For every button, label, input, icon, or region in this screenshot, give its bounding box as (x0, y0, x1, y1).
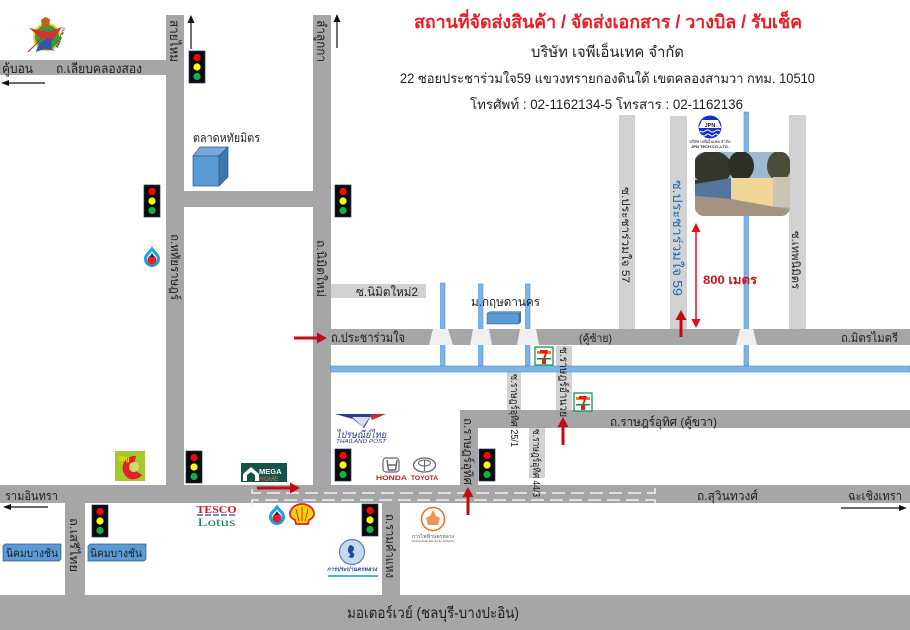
logo: Tesco Lotus: Lotus (198, 515, 236, 529)
icon: PTT station north (144, 246, 160, 267)
logo: Toyota (411, 458, 439, 482)
logo: Thailand Post: ไปรษณีย์ไทย (336, 429, 387, 441)
label: Soi 59: ซ.ประชาร่วมใจ 59 (670, 180, 685, 296)
label: Soi Rat Amnuai: ซ.ราษฎร์อำนวย (557, 347, 570, 417)
sign: Nikhom Bang Chan east: นิคมบางชัน (90, 547, 142, 560)
label: Khu Bon: คู้บอน (2, 61, 33, 77)
logo: Mega Home (241, 463, 287, 483)
icon: PTT station south (269, 504, 285, 525)
photo: company site (692, 151, 791, 216)
icon: Khlong Sam Wa emblem (28, 17, 66, 52)
phone and fax: โทรศัพท์ : 02-1162134-5 โทรสาร : 02-1162136 (470, 96, 743, 112)
logo: Mega Home: MEGA (259, 467, 282, 476)
label: Ramkhamhaeng: ถ.รามคำแหง (383, 514, 397, 578)
address: 22 ซอยประชาร่วมใจ59 แขวงทรายกองดินใต้ เขตคลองสามวา กทม. 10510 (400, 70, 815, 86)
label: Lam Luk Ka: ลำลูกกา (313, 20, 329, 62)
sign: Nikhom Bang Chan east (88, 544, 146, 561)
logo: Big C (115, 451, 145, 481)
bridges (429, 329, 757, 345)
sign: Nikhom Bang Chan west (3, 544, 61, 561)
logo: Shell (290, 504, 314, 524)
logo: Tesco Lotus (196, 505, 237, 529)
logo: JPN Tech: JPN TECH CO.,LTD. (691, 144, 729, 149)
label: Seri Thai: ถ.เสรีไทย (67, 518, 81, 572)
logo: Metropolitan Electricity Authority (412, 508, 455, 543)
logo: Mega Home: HOME (259, 476, 279, 483)
logo: Thailand Post: THAILAND POST (336, 439, 387, 445)
logo: JPN Tech: บริษัท เจพีเอ็นเทค จำกัด (689, 138, 731, 144)
label: Suwinthawong: ถ.สุวินทวงศ์ (697, 489, 758, 504)
label: Soi 57: ซ.ประชาร่วมใจ 57 (619, 187, 632, 283)
icon: Khlong Sam Wa emblem: คลองสามวา (54, 27, 66, 48)
canals (331, 112, 910, 372)
label: Hathai Rat road: ถ.หทัยราษฎร์ (168, 234, 182, 301)
label: ม.กฤษดานคร (471, 295, 540, 309)
sign: Nikhom Bang Chan west: นิคมบางชัน (6, 547, 58, 560)
logo: JPN Tech: JPN (705, 123, 715, 129)
label: left lane: (คู้ซ้าย) (579, 333, 612, 345)
label: Soi 44/3: ซ.ราษฎร์อุทิศ 44/3 (530, 429, 542, 497)
label: motorway: มอเตอร์เวย์ (ชลบุรี-บางปะอิน) (347, 605, 519, 623)
label: Soi 25/1: ซ.ราษฎร์อุทิศ 25/1 (508, 374, 520, 447)
side lanes (331, 115, 806, 478)
black direction arrows (1, 14, 907, 511)
logo: Tesco Lotus: TESCO (196, 505, 237, 516)
label: Pracha Ruam Chai road: ถ.ประชาร่วมใจ (331, 330, 405, 345)
red route arrows (257, 310, 686, 515)
label: ตลาดหทัยมิตร (193, 131, 260, 145)
distance marker: 800 metres: 800 เมตร (703, 273, 758, 287)
label: Nimit Mai road: ถ.นิมิตใหม่ (314, 240, 328, 297)
label: Sai Mai: สายไหม (167, 20, 182, 62)
building: Hathai Mit market (193, 131, 260, 186)
logo: Thailand Post (335, 414, 387, 445)
icon: 7-Eleven south (574, 393, 592, 411)
building: Krisda Nakhon village (471, 295, 540, 324)
label: Liap Khlong Song: ถ.เลียบคลองสอง (56, 61, 142, 76)
icon: 7-Eleven north (535, 347, 553, 365)
logo: JPN Tech (689, 116, 731, 149)
company name: บริษัท เจพีเอ็นเทค จำกัด (531, 42, 684, 61)
label: Rat Uthit right lane: ถ.ราษฎร์อุทิศ (คู้ขวา) (610, 415, 717, 430)
lane markings on Suwinthawong (252, 488, 655, 506)
distance marker: 800 metres (692, 223, 758, 328)
logo: Honda (376, 458, 408, 482)
logo: Toyota: TOYOTA (411, 476, 439, 482)
label: right lane soi: ซ.เทพนิมิตร (789, 231, 801, 289)
title: สถานที่จัดส่งสินค้า / จัดส่งเอกสาร / วางบิล / รับเช็ค (414, 9, 802, 32)
logo: Metropolitan Waterworks Authority (327, 540, 378, 576)
traffic lights (92, 51, 495, 537)
label: Ram Intra: รามอินทรา (5, 489, 58, 503)
logo: Honda: HONDA (376, 476, 408, 482)
logo: Metropolitan Waterworks Authority: การประปานครหลวง (327, 566, 378, 573)
label: Chachoengsao: ฉะเชิงเทรา (848, 489, 902, 503)
logo: Big C: Big (119, 456, 130, 463)
label: Soi Nimit Mai 2: ซ.นิมิตใหม่2 (356, 285, 418, 299)
logo: Metropolitan Electricity Authority: Metropolitan Electricity Authority (412, 539, 455, 543)
header block (400, 9, 815, 112)
logo: Metropolitan Electricity Authority: การไฟฟ้านครหลวง (412, 533, 455, 540)
label: Mit Maitri road: ถ.มิตรไมตรี (841, 331, 899, 345)
label: Rat Uthit vertical: ถ.ราษฎร์อุทิศ (460, 418, 475, 485)
